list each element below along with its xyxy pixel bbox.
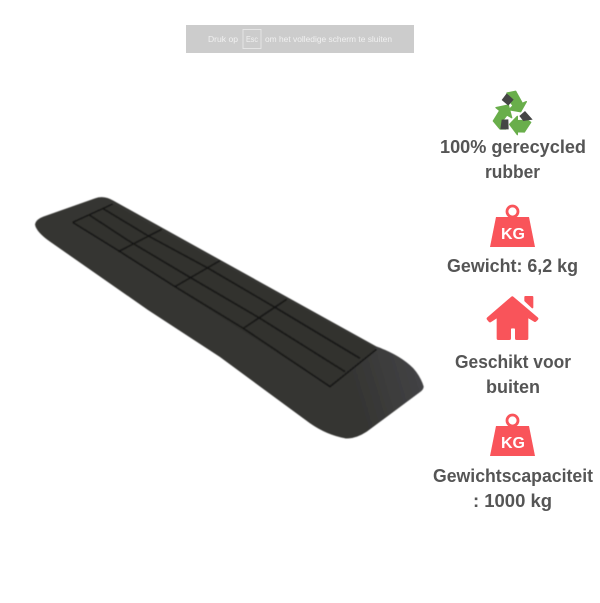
icon: house xyxy=(488,297,537,338)
label: weight capacity: Gewichtscapaciteit xyxy=(433,466,593,486)
label: suitable for outdoors: buiten xyxy=(486,377,540,397)
label: suitable for outdoors: Geschikt voor xyxy=(455,352,571,372)
icon: weight capacity KG: KG xyxy=(501,435,525,452)
fullscreen notice banner xyxy=(186,25,414,53)
fullscreen notice banner: Druk op xyxy=(208,35,239,44)
label: suitable for outdoors xyxy=(455,352,571,397)
label: weight capacity: : 1000 kg xyxy=(473,491,552,511)
label: recycled rubber: rubber xyxy=(485,162,540,182)
label: recycled rubber: 100% gerecycled xyxy=(440,137,586,157)
icon: weight KG: KG xyxy=(501,226,525,243)
label: weight: Gewicht: 6,2 kg xyxy=(447,256,578,276)
product image: black rubber threshold ramp xyxy=(35,197,424,438)
icon: weight KG xyxy=(490,206,535,247)
icon: weight capacity KG xyxy=(490,415,535,456)
label: recycled rubber xyxy=(440,137,586,182)
label: weight capacity xyxy=(433,466,593,511)
fullscreen notice banner: om het volledige scherm te sluiten xyxy=(265,35,392,44)
fullscreen notice banner: Esc xyxy=(246,35,258,44)
icon: recycling arrows xyxy=(493,91,533,135)
